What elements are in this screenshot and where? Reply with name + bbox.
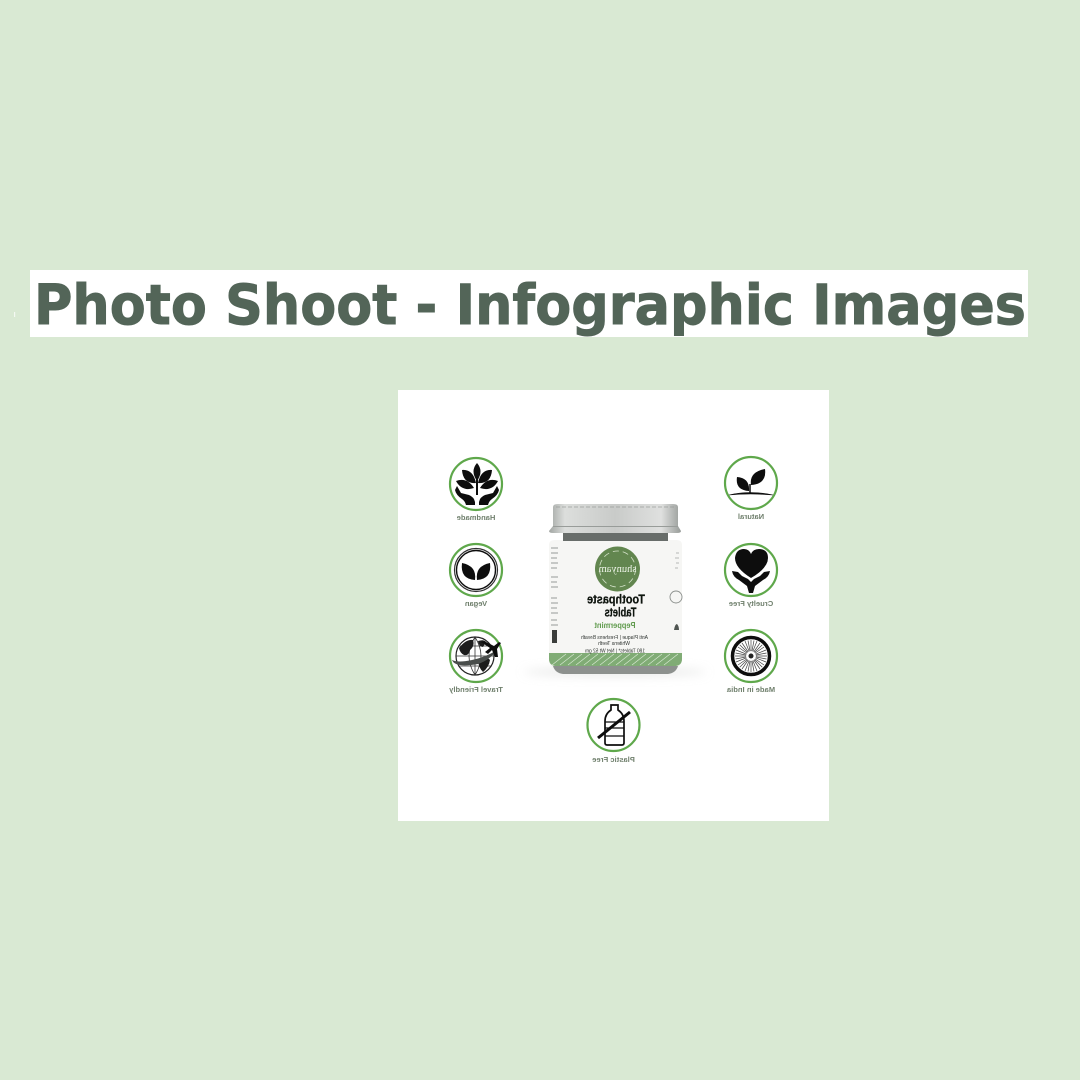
brand logo	[595, 546, 640, 592]
product name	[587, 592, 645, 620]
product name: Tablets	[604, 606, 636, 620]
label: travel friendly: Travel Friendly	[448, 685, 503, 694]
panel: product photo	[398, 390, 829, 821]
jar shadow	[523, 668, 707, 676]
icon: vegan	[450, 544, 502, 596]
product claims: 180 Tablets* | Net Wt 52 gm	[585, 648, 645, 654]
title: Photo Shoot - Infographic Images	[34, 273, 1026, 337]
icon: natural	[725, 457, 777, 509]
small stray mark	[14, 312, 15, 317]
icon: handmade	[450, 458, 502, 510]
label: cruelty free: Cruelty Free	[729, 599, 773, 608]
side label details	[551, 548, 682, 643]
icon: cruelty free	[725, 544, 777, 596]
band	[549, 653, 682, 666]
icon: travel friendly	[450, 630, 502, 682]
flavour: Peppermint	[594, 620, 636, 630]
icon: made in india	[725, 630, 777, 682]
label: made in india: Made in India	[726, 685, 775, 694]
label: natural: Natural	[738, 512, 764, 521]
product claims: Anti Plaque | Freshens Breath	[581, 635, 648, 641]
label: vegan: Vegan	[464, 599, 487, 608]
toothpaste jar	[549, 504, 682, 674]
product name: Toothpaste	[587, 592, 645, 606]
product claims: Whitens Teeth	[598, 641, 630, 647]
label: handmade: Handmade	[457, 513, 495, 522]
icon: plastic free	[588, 699, 640, 751]
product claims	[581, 635, 648, 654]
brand logo: shunyam	[598, 564, 636, 575]
label: plastic free: Plastic Free	[592, 755, 635, 764]
